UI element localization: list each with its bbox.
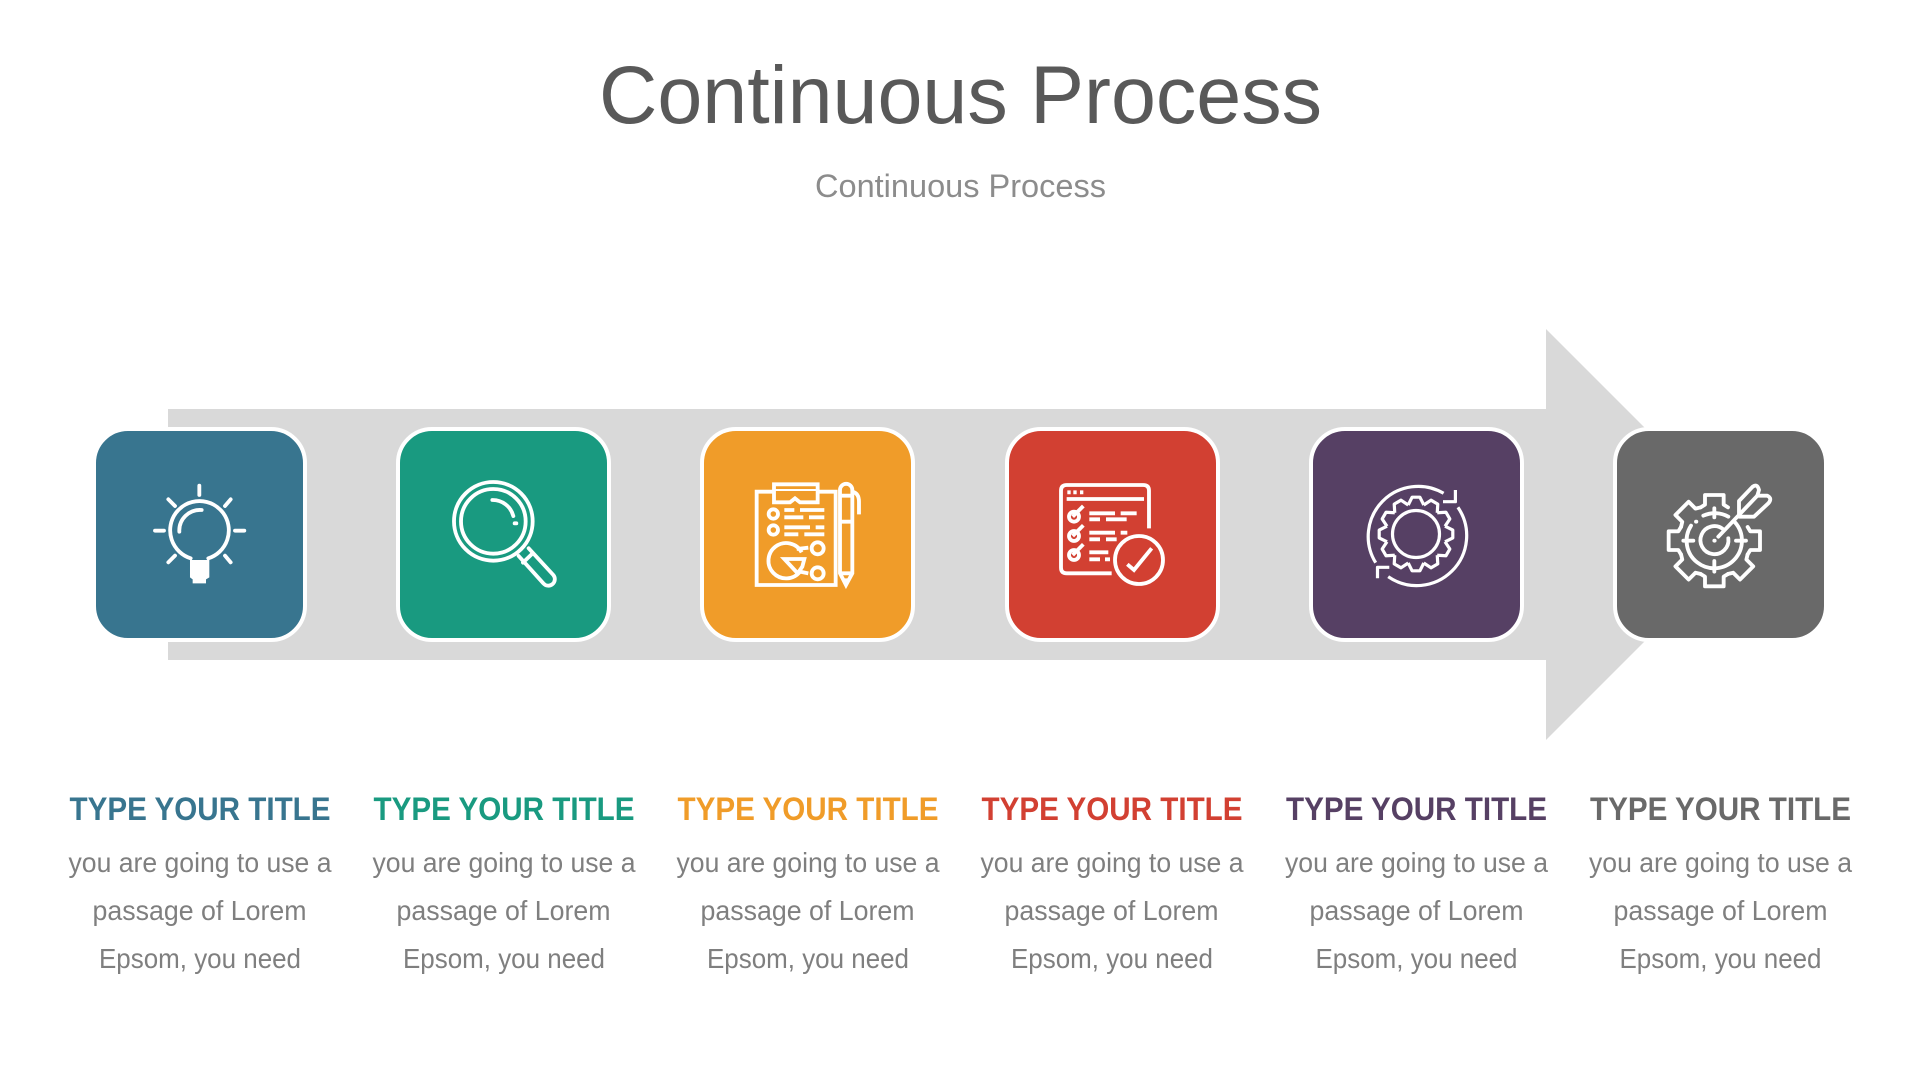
text block: step 2 <box>372 791 636 974</box>
process arrow <box>168 329 1752 740</box>
subtitle: Continuous Process <box>815 168 1106 204</box>
title: Continuous Process <box>599 50 1322 141</box>
tile: step 4 <box>1007 429 1218 640</box>
body: step 4 line 3: Epsom, you need <box>1011 943 1213 974</box>
body: step 4 line 1: you are going to use a <box>980 847 1244 878</box>
text block: step 1 <box>68 791 332 974</box>
text block: step 5 <box>1285 791 1548 974</box>
step 3: planning <box>702 429 913 640</box>
body: step 2 line 1: you are going to use a <box>372 847 636 878</box>
tile: step 6 <box>1615 429 1826 640</box>
heading: step 3: TYPE YOUR TITLE <box>678 791 938 827</box>
step 6: goal <box>1615 429 1826 640</box>
body: step 3 line 1: you are going to use a <box>676 847 940 878</box>
icon: rotating gear <box>1368 486 1467 586</box>
heading: step 2: TYPE YOUR TITLE <box>374 791 634 827</box>
body: step 5 line 1: you are going to use a <box>1285 847 1548 878</box>
tile: step 3 <box>702 429 913 640</box>
tile: step 5 <box>1311 429 1522 640</box>
step 1: idea <box>94 429 305 640</box>
body: step 6 line 2: passage of Lorem <box>1614 895 1828 926</box>
body: step 3 line 2: passage of Lorem <box>700 895 914 926</box>
text block: step 4 <box>980 791 1244 974</box>
step 4: checklist <box>1007 429 1218 640</box>
heading: step 6: TYPE YOUR TITLE <box>1590 791 1851 827</box>
body: step 5 line 3: Epsom, you need <box>1316 943 1518 974</box>
heading: step 5: TYPE YOUR TITLE <box>1286 791 1547 827</box>
step 5: iteration <box>1311 429 1522 640</box>
body: step 5 line 2: passage of Lorem <box>1310 895 1524 926</box>
body: step 3 line 3: Epsom, you need <box>707 943 909 974</box>
body: step 6 line 1: you are going to use a <box>1589 847 1852 878</box>
icon: clipboard and pen <box>757 484 859 585</box>
text block: step 6 <box>1589 791 1852 974</box>
heading: step 4: TYPE YOUR TITLE <box>982 791 1242 827</box>
body: step 4 line 2: passage of Lorem <box>1004 895 1218 926</box>
icon: light bulb <box>155 486 244 583</box>
body: step 1 line 3: Epsom, you need <box>99 943 301 974</box>
icon: checklist with tick <box>1061 485 1163 584</box>
body: step 2 line 2: passage of Lorem <box>396 895 610 926</box>
body: step 2 line 3: Epsom, you need <box>403 943 605 974</box>
body: step 6 line 3: Epsom, you need <box>1620 943 1822 974</box>
body: step 1 line 1: you are going to use a <box>68 847 332 878</box>
icon: magnifying glass <box>454 482 555 586</box>
heading: step 1: TYPE YOUR TITLE <box>70 791 330 827</box>
icon: gear target with arrow <box>1669 486 1770 586</box>
tile: step 1 <box>94 429 305 640</box>
body: step 1 line 2: passage of Lorem <box>92 895 306 926</box>
text block: step 3 <box>676 791 940 974</box>
tile: step 2 <box>398 429 609 640</box>
step 2: research <box>398 429 609 640</box>
